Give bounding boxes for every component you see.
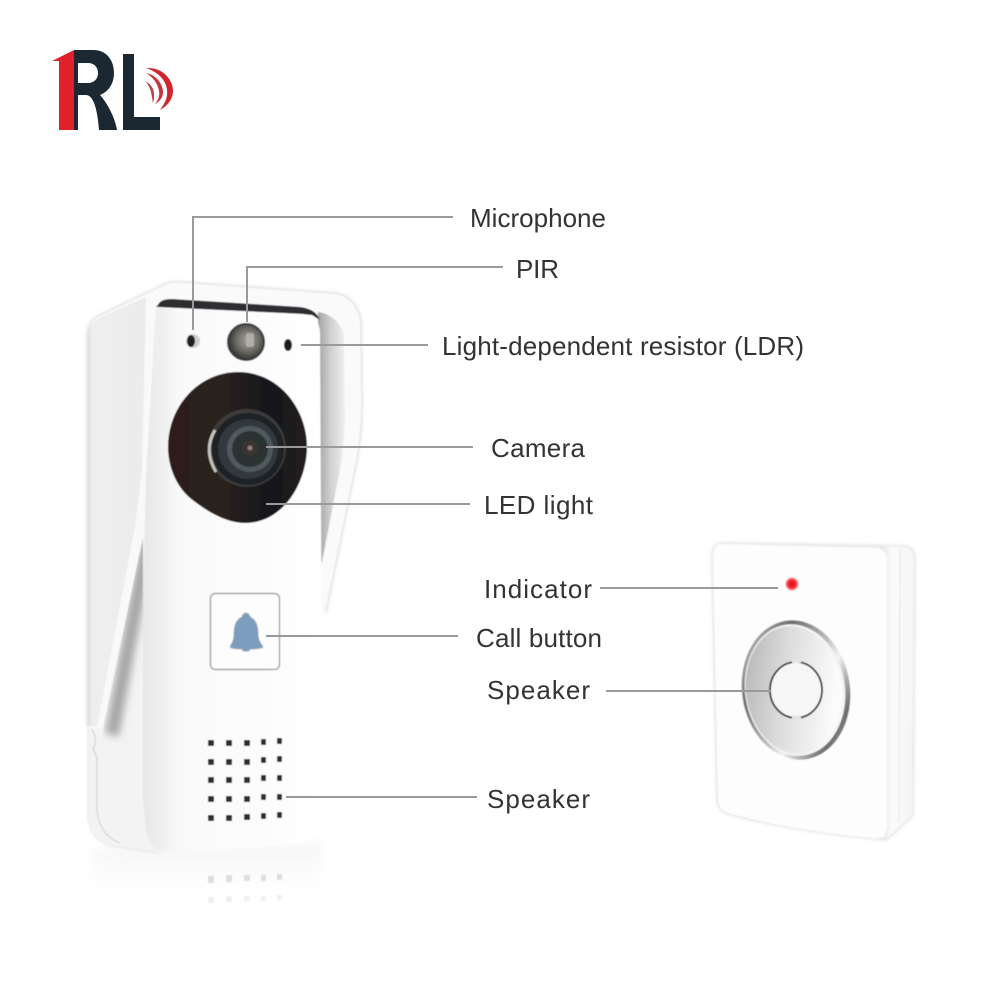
back plate outline xyxy=(89,728,160,852)
back plate seam and notch xyxy=(92,729,120,843)
doorbell reflection xyxy=(92,842,323,903)
label: Microphone: Microphone xyxy=(470,203,606,233)
label: Indicator: Indicator xyxy=(484,574,592,604)
indicator LED xyxy=(786,578,798,590)
label: Camera: Camera xyxy=(491,433,586,463)
PIR sensor xyxy=(228,324,264,360)
receiver soft outline xyxy=(713,544,914,839)
wing bevel xyxy=(97,296,156,728)
doorbell unit xyxy=(88,283,361,853)
wing cast shadow xyxy=(112,540,148,735)
receiver side xyxy=(880,546,914,839)
label: LDR: Light-dependent resistor (LDR) xyxy=(442,331,804,361)
label: LED light: LED light xyxy=(484,490,594,520)
hood inner right xyxy=(318,312,345,562)
icon: bell xyxy=(230,613,263,651)
label: PIR: PIR xyxy=(516,254,559,284)
speaker grille xyxy=(208,738,282,821)
hood outer shell xyxy=(88,283,361,728)
callout lines xyxy=(193,217,778,797)
label: Call button: Call button xyxy=(476,623,602,653)
lower body and back plate xyxy=(89,537,165,853)
camera panel xyxy=(168,372,307,523)
receiver front xyxy=(713,544,887,838)
label: Speaker on receiver: Speaker xyxy=(487,675,590,705)
camera lens xyxy=(208,409,286,487)
hood left wing xyxy=(88,297,146,727)
receiver button xyxy=(733,613,859,767)
front face xyxy=(143,307,323,852)
call button xyxy=(210,594,280,670)
logo: RL xyxy=(52,50,173,130)
label: Speaker on doorbell: Speaker xyxy=(487,784,590,814)
receiver chime unit xyxy=(713,544,914,839)
LDR hole xyxy=(284,339,292,351)
microphone hole xyxy=(186,334,200,348)
hood top shadow xyxy=(156,299,320,320)
hood soft outline xyxy=(88,283,361,727)
